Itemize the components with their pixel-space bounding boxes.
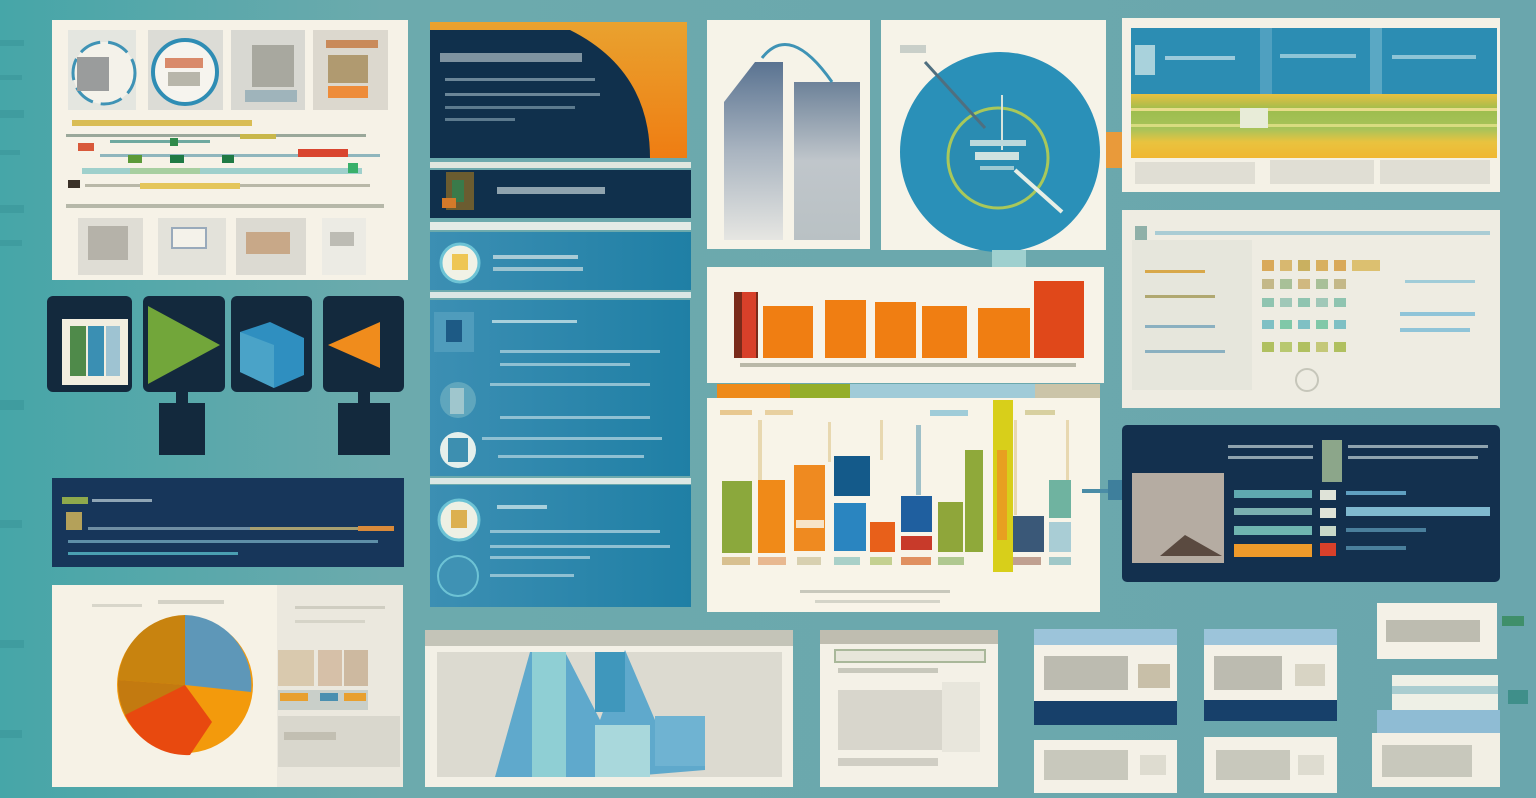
icon: storage tile <box>47 296 132 392</box>
thumbnail: ring gauge two <box>148 30 223 110</box>
panel: striped banner <box>1122 18 1500 192</box>
card: lower one <box>1034 740 1177 793</box>
whiskers <box>758 420 1069 515</box>
icon: orange left arrow <box>323 296 404 392</box>
card: note <box>1377 603 1497 659</box>
panel: multi bar chart <box>707 398 1100 612</box>
panel: pie chart <box>52 585 403 787</box>
side table <box>278 650 400 767</box>
connector blocks <box>159 392 390 455</box>
pie chart graphic <box>117 615 253 755</box>
panel: map with peaks <box>425 630 793 787</box>
card: top two <box>1204 629 1337 721</box>
thumbnail: report <box>313 30 388 110</box>
panel: circle diagram <box>881 20 1106 270</box>
arrow: orange tab <box>1106 132 1122 168</box>
thumbnail: ring gauge one <box>68 30 136 110</box>
gantt chart <box>66 120 380 189</box>
color grid <box>1262 260 1380 352</box>
panel: blue list middle <box>430 292 691 476</box>
thumbnail: map <box>231 30 305 110</box>
arrow arc <box>762 44 832 82</box>
axis labels <box>722 557 1071 565</box>
thumbnail row <box>78 218 366 275</box>
panel: timeline overview <box>52 20 408 280</box>
pillar left <box>724 62 783 240</box>
panel: orange bar strip <box>707 267 1104 383</box>
panel: document <box>820 630 998 787</box>
panel: navy dashboard <box>1122 425 1500 582</box>
card: top one <box>1034 629 1177 725</box>
left edge bands <box>0 40 24 738</box>
card: lower two <box>1204 737 1337 793</box>
panel: blue list bottom <box>430 478 691 607</box>
panel: data matrix <box>1122 210 1500 408</box>
stripes <box>1131 94 1497 158</box>
panel: dark title band <box>430 162 691 218</box>
icon: green play arrow <box>143 296 225 392</box>
panel: dark header with orange corner <box>430 22 687 158</box>
color strip <box>717 384 1100 399</box>
pillar right <box>794 82 860 240</box>
panel: twin pillars <box>707 20 870 249</box>
panel: navy summary band <box>52 478 404 567</box>
icon: small leaf markers <box>1502 616 1528 704</box>
bars <box>722 400 1071 572</box>
icon: blue cube <box>231 296 312 392</box>
panel: blue list item top <box>430 222 691 290</box>
card: layered note <box>1372 675 1500 787</box>
arrow: to navy panel <box>1082 480 1122 500</box>
